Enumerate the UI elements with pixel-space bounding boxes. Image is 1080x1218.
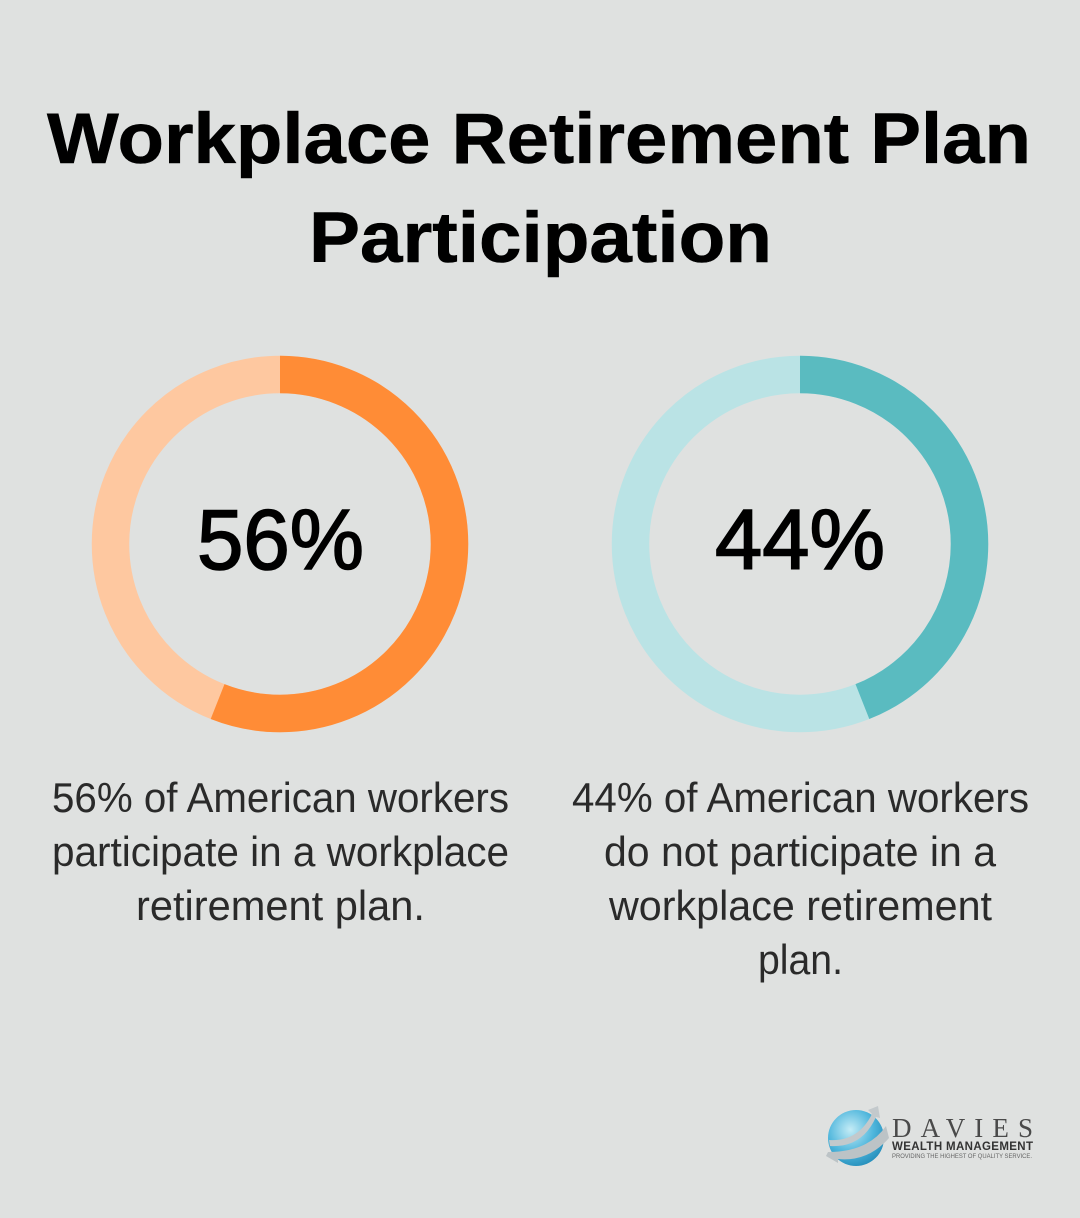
title bbox=[47, 100, 1031, 278]
value: 44%: 44% bbox=[715, 493, 885, 588]
title: Participation bbox=[309, 199, 772, 278]
description: 44%: do not participate in a bbox=[604, 828, 997, 875]
description: 56%: 56% of American workers bbox=[52, 774, 509, 821]
icon: globe with arrows bbox=[826, 1106, 889, 1166]
donut chart: 44% bbox=[630, 374, 970, 714]
donut chart: 56% bbox=[110, 374, 450, 714]
description: 44%: workplace retirement bbox=[608, 882, 992, 929]
description: 56%: participate in a workplace bbox=[52, 828, 509, 875]
description: 56% bbox=[52, 774, 509, 929]
description: 56%: retirement plan. bbox=[136, 882, 425, 929]
value: 56%: 56% bbox=[197, 493, 364, 588]
wordmark bbox=[892, 1113, 1033, 1160]
wordmark: PROVIDING THE HIGHEST OF QUALITY SERVICE. bbox=[892, 1153, 1032, 1160]
description: 44%: 44% of American workers bbox=[572, 774, 1029, 821]
description: 44% bbox=[572, 774, 1029, 983]
logo: Davies Wealth Management bbox=[826, 1106, 1033, 1166]
wordmark: WEALTH MANAGEMENT bbox=[892, 1141, 1033, 1153]
panel: 44% do not participate bbox=[572, 374, 1029, 983]
description: 44%: plan. bbox=[758, 936, 843, 983]
wordmark: DAVIES bbox=[892, 1113, 1033, 1143]
panel: 56% participate bbox=[52, 374, 509, 929]
title: Workplace Retirement Plan bbox=[47, 100, 1031, 179]
